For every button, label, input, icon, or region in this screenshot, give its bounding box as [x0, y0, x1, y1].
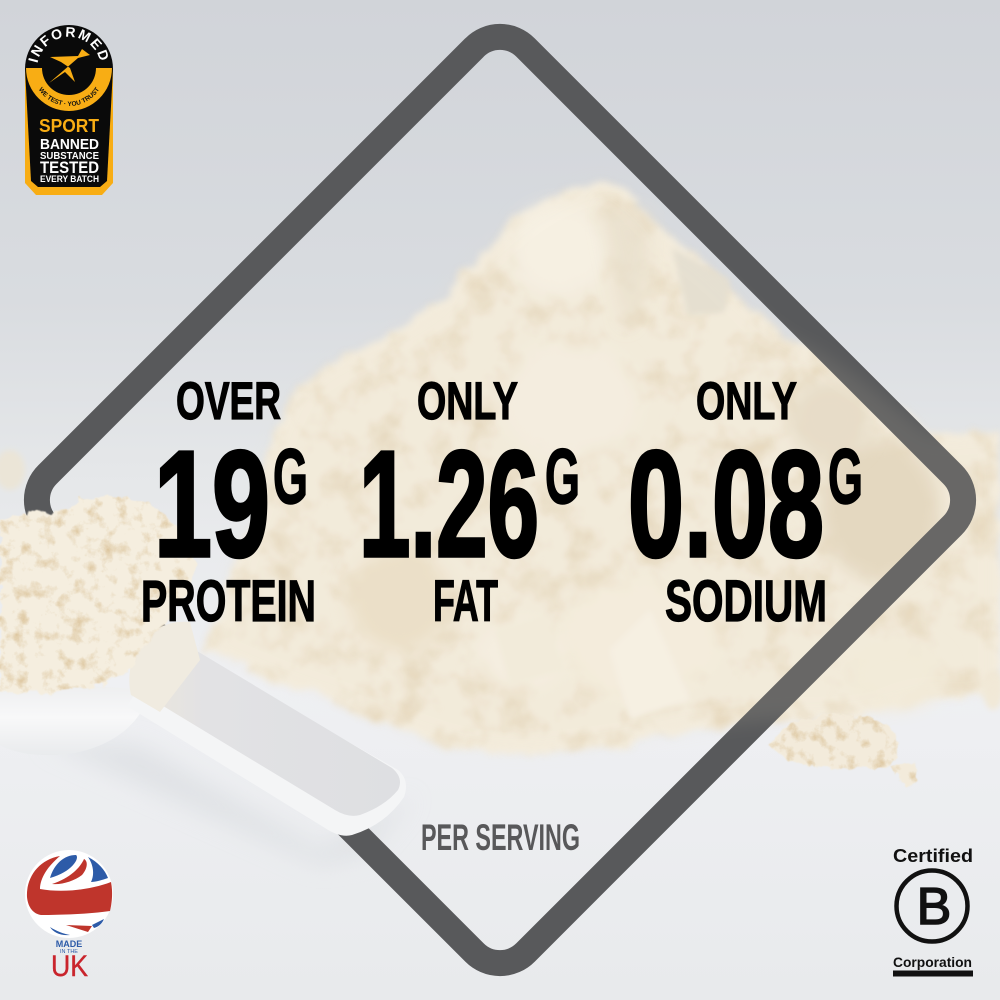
badge black arch	[25, 25, 113, 187]
uk text: UK	[51, 950, 88, 983]
underline bar	[893, 970, 973, 976]
stat: protein: OVER	[176, 372, 281, 431]
per serving caption: PER SERVING	[421, 817, 580, 858]
badge details: TESTED	[40, 158, 99, 177]
badge: certified b corporation	[893, 845, 973, 976]
badge shield	[25, 68, 113, 195]
b in circle: B	[917, 878, 951, 936]
stat: protein	[141, 372, 316, 634]
badge logo mark	[49, 49, 90, 83]
corporation text: Corporation	[893, 954, 972, 970]
yellow band	[26, 68, 112, 111]
made text: MADE	[56, 939, 82, 949]
badge details	[40, 136, 99, 184]
loose powder crumbs	[770, 670, 1000, 790]
pile tint over frame	[205, 180, 1000, 754]
scoop handle	[127, 622, 406, 836]
flag globe	[25, 850, 113, 938]
badge: informed sport	[25, 25, 113, 195]
stat: protein: 19	[154, 419, 270, 588]
stat: fat: FAT	[433, 569, 498, 634]
stat: fat: G	[545, 432, 580, 520]
pile shading	[350, 205, 945, 720]
stat: sodium	[628, 372, 863, 634]
scoop powder	[0, 497, 193, 692]
badge details: EVERY BATCH	[40, 174, 99, 184]
informed arc text: INFORMED	[28, 27, 108, 62]
badge: made in the uk	[25, 850, 113, 983]
stat: sodium: 0.08	[628, 419, 824, 588]
certified text: Certified	[893, 845, 973, 866]
stat: sodium: ONLY	[696, 372, 797, 431]
in the text: IN THE	[60, 949, 78, 955]
stat: fat: 1.26	[359, 419, 539, 588]
powder pile	[205, 180, 1000, 754]
scoop shadow	[40, 740, 415, 865]
tagline arc text: WE TEST · YOU TRUST	[39, 86, 98, 106]
sport label: SPORT	[39, 116, 99, 136]
stat: fat: ONLY	[417, 372, 518, 431]
scoop	[0, 497, 406, 836]
stat: protein: PROTEIN	[141, 569, 316, 634]
stat: sodium: SODIUM	[665, 569, 827, 634]
scoop bowl	[0, 680, 150, 755]
stat: protein: G	[273, 432, 308, 520]
left background crumbs	[0, 450, 25, 490]
badge details: BANNED	[40, 136, 99, 153]
stat: fat	[359, 372, 580, 634]
stat: sodium: G	[828, 432, 863, 520]
badge details: SUBSTANCE	[40, 150, 99, 162]
